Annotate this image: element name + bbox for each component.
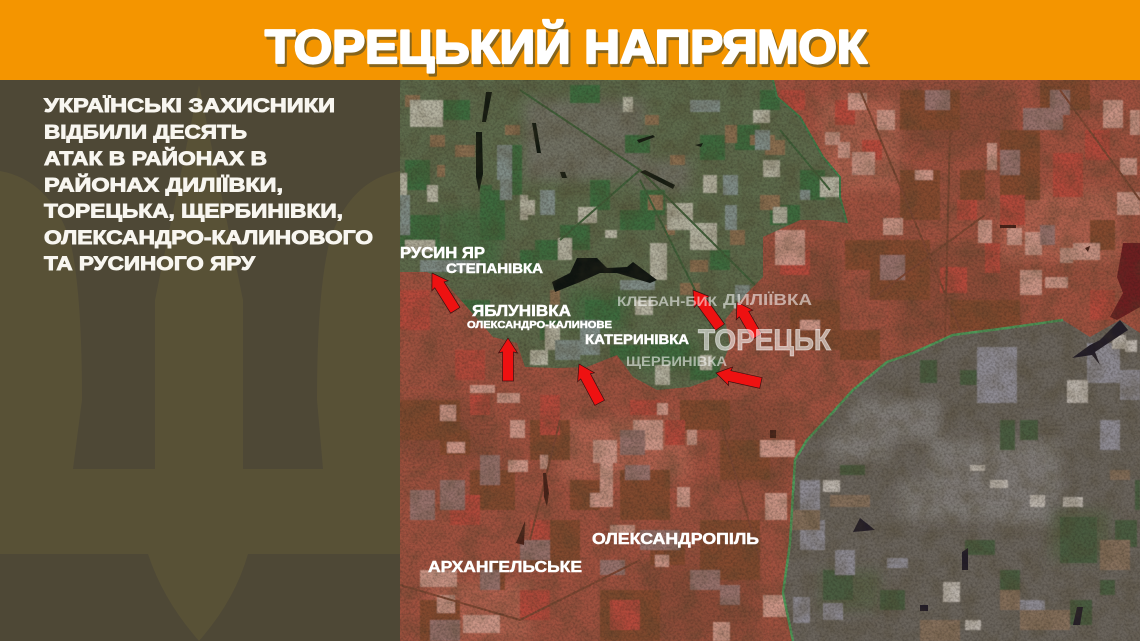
title: ТОРЕЦЬКИЙ НАПРЯМОК: [265, 20, 867, 73]
panel text: ТОРЕЦЬКА, ЩЕРБИНІВКИ,: [44, 200, 343, 222]
label: Олександро-Калинове: ОЛЕКСАНДРО-КАЛИНОВЕ: [467, 319, 612, 331]
left panel: [0, 80, 400, 641]
label: Катеринівка: КАТЕРИНІВКА: [585, 331, 689, 347]
label: Яблунівка: ЯБЛУНІВКА: [472, 303, 571, 320]
label: Клебан-Бик: КЛЕБАН-БИК: [617, 294, 718, 309]
arrow: Яблунівка direction: [498, 338, 518, 381]
occupied territory (red): [400, 80, 1140, 641]
label: Архангельське: АРХАНГЕЛЬСЬКЕ: [428, 559, 582, 576]
label: Диліївка: ДИЛІЇВКА: [723, 291, 813, 309]
map labels: [400, 245, 759, 576]
panel text: [44, 94, 373, 275]
label: Торецьк: ТОРЕЦЬК: [698, 324, 832, 357]
panel text: ОЛЕКСАНДРО-КАЛИНОВОГО: [44, 227, 373, 249]
panel text: ВІДБИЛИ ДЕСЯТЬ: [44, 122, 247, 144]
title: ТОРЕЦЬКИЙ НАПРЯМОК: [267, 23, 869, 76]
arrow: Катеринівка direction: [571, 360, 608, 407]
Ukrainian-held territory (green): [400, 80, 860, 400]
panel text: РАЙОНАХ ДИЛІЇВКИ,: [44, 172, 283, 196]
arrow: Щербинівка direction: [714, 364, 763, 392]
satellite map: [400, 80, 1140, 641]
arrows: [424, 268, 765, 407]
grey occupied zone: [780, 310, 1140, 641]
arrow: Диліївка direction: [729, 297, 765, 341]
trident watermark: [0, 85, 400, 641]
label: Степанівка: СТЕПАНІВКА: [446, 261, 543, 276]
lake: [552, 258, 657, 292]
panel text: ТА РУСИНОГО ЯРУ: [44, 253, 256, 275]
panel text: АТАК В РАЙОНАХ В: [44, 146, 267, 170]
reservoir in occupied territory: [1110, 243, 1140, 320]
header bar: [0, 0, 1140, 80]
label: Щербинівка: ЩЕРБИНІВКА: [626, 354, 727, 369]
label: Олександропіль: ОЛЕКСАНДРОПІЛЬ: [592, 531, 759, 548]
panel text: УКРАЇНСЬКІ ЗАХИСНИКИ: [44, 94, 335, 117]
photo texture: [400, 80, 1140, 641]
label: Русин Яр: РУСИН ЯР: [400, 245, 485, 262]
arrow: Клебан-Бик direction: [685, 284, 728, 333]
arrow: Русин Яр direction: [424, 268, 463, 315]
